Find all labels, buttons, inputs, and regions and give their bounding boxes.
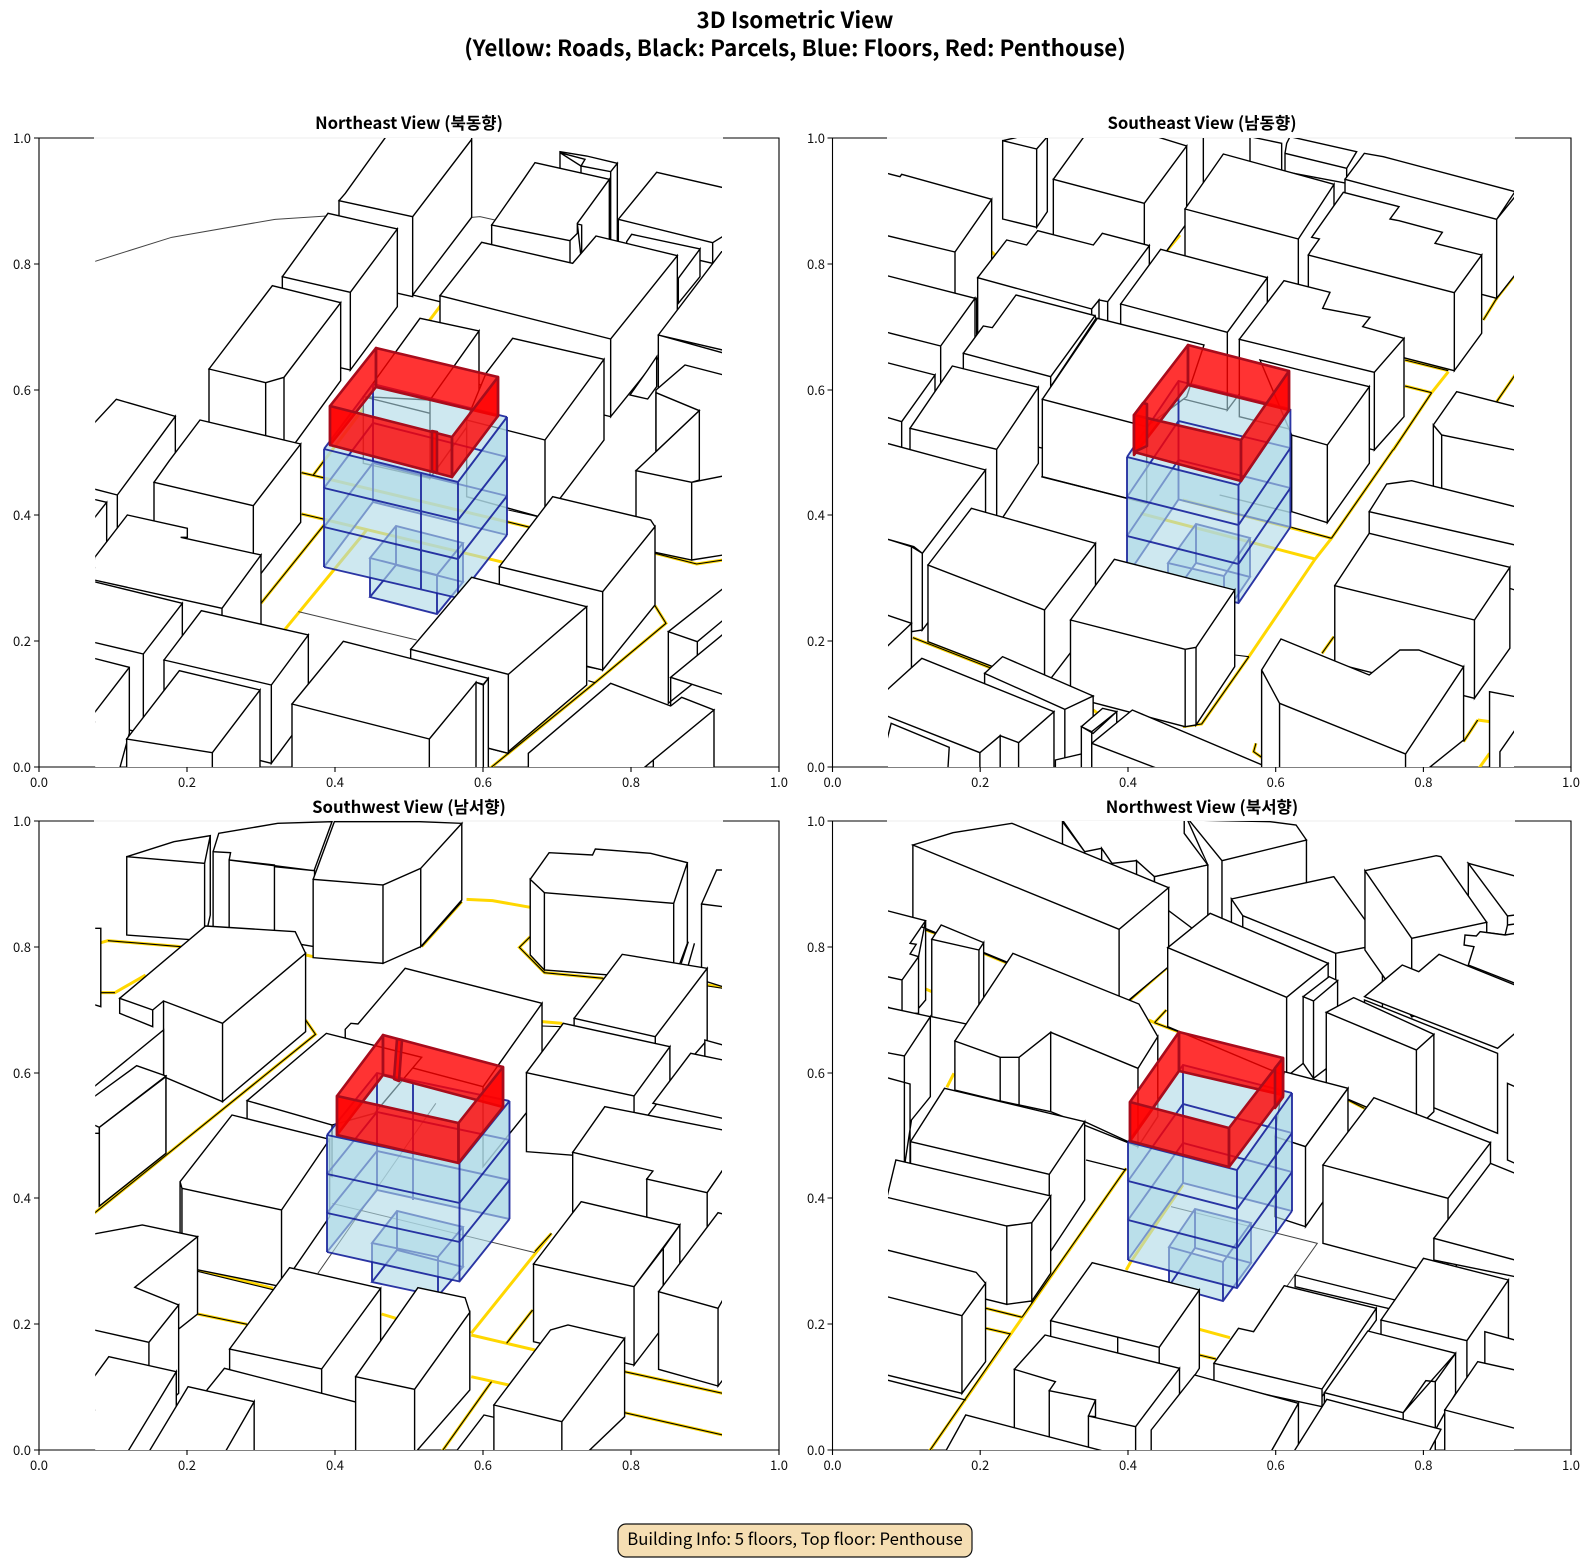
heading: northeast: Northeast View (북동향) <box>315 110 503 134</box>
axes: northeast: 0.6 <box>474 772 492 791</box>
axes: southwest: 0.2 <box>178 1455 196 1474</box>
axes: southwest: 0.8 <box>622 1455 640 1474</box>
callout: building info <box>618 1524 972 1557</box>
penthouse: red walls <box>330 348 498 477</box>
axes: southwest: 0.8 <box>13 937 31 956</box>
buildings behind the tower <box>887 137 1515 687</box>
roads and parcels <box>923 930 1364 1460</box>
callout: building info: Building Info: 5 floors, Top floor: Penthouse <box>627 1526 963 1550</box>
buildings in front of the tower <box>290 496 716 767</box>
axes: northwest: 1.0 <box>1562 1455 1580 1474</box>
drawing: southwest scene <box>94 822 723 1477</box>
axes: northeast: 0.4 <box>326 772 344 791</box>
floors: blue tower <box>327 1073 510 1296</box>
axes: northwest: 0.2 <box>971 1455 989 1474</box>
axes: southwest: 0.0 <box>30 1455 48 1474</box>
axes: southwest: 1.0 <box>770 1455 788 1474</box>
buildings behind the tower <box>887 820 1515 1400</box>
penthouse: red walls <box>337 1035 503 1163</box>
axes: southeast: 0.6 <box>1267 772 1285 791</box>
axes: northwest: 0.4 <box>807 1188 825 1207</box>
axes: northwest: 0.4 <box>1119 1455 1137 1474</box>
buildings in front of the tower <box>887 533 1515 787</box>
axes: southwest: 1.0 <box>13 811 31 830</box>
title: (Yellow: Roads, Black: Parcels, Blue: Floors, Red: Penthouse) <box>464 31 1126 63</box>
floors: blue tower <box>1127 381 1290 615</box>
buildings in front of the tower <box>95 1266 626 1450</box>
roads and parcels <box>94 216 723 768</box>
axes: northeast: 0.0 <box>13 757 31 776</box>
axes: northeast: 1.0 <box>13 128 31 147</box>
axes: northwest: 1.0 <box>807 811 825 830</box>
axes: southeast: 0.8 <box>1414 772 1432 791</box>
floors: blue tower <box>324 384 507 614</box>
axes: northwest: 0.6 <box>807 1063 825 1082</box>
axes: northwest: 0.2 <box>807 1314 825 1333</box>
axes: southeast: 0.4 <box>1119 772 1137 791</box>
axes: southeast: 1.0 <box>1562 772 1580 791</box>
drawing: northeast scene <box>95 138 722 767</box>
axes: northeast: 1.0 <box>770 772 788 791</box>
axes: southwest: 0.6 <box>13 1063 31 1082</box>
penthouse: red walls <box>1130 1032 1283 1167</box>
axes: southwest: 0.0 <box>13 1440 31 1459</box>
axes: southeast: 0.2 <box>971 772 989 791</box>
axes: southeast: 0.8 <box>807 254 825 273</box>
roads and parcels <box>913 235 1515 780</box>
axes: southeast: 0.0 <box>823 772 842 791</box>
axes: southeast: 0.2 <box>807 631 825 650</box>
title <box>464 3 1126 63</box>
axes: northeast: 0.8 <box>13 254 31 273</box>
axes: northeast: 0.2 <box>178 772 196 791</box>
axes: northwest: 0.6 <box>1267 1455 1285 1474</box>
axes: northeast: 0.2 <box>13 631 31 650</box>
panel: southeast view <box>807 110 1580 791</box>
axes: northeast <box>13 128 788 791</box>
buildings behind the tower <box>94 822 723 1420</box>
axes: southeast: 0.4 <box>807 505 825 524</box>
axes: northeast: 0.6 <box>13 380 31 399</box>
axes: northwest: 0.8 <box>807 937 825 956</box>
axes: northwest <box>807 811 1580 1474</box>
axes: southwest: 0.6 <box>474 1455 492 1474</box>
panel: southwest view <box>13 794 788 1477</box>
axes: northwest: 0.0 <box>807 1440 825 1459</box>
axes: southeast: 0.6 <box>807 380 825 399</box>
buildings behind the tower <box>95 138 722 767</box>
axes: southwest: 0.4 <box>326 1455 344 1474</box>
axes: northeast: 0.4 <box>13 505 31 524</box>
heading: southeast: Southeast View (남동향) <box>1107 110 1297 134</box>
drawing: southeast scene <box>887 137 1515 787</box>
drawing: northwest scene <box>887 820 1515 1460</box>
floors: blue tower <box>1128 1065 1292 1301</box>
axes: southeast <box>807 128 1580 791</box>
axes: southwest: 0.2 <box>13 1314 31 1333</box>
panel: northeast view <box>13 110 788 830</box>
penthouse: red walls <box>1134 345 1289 481</box>
axes: northeast: 0.0 <box>30 772 48 791</box>
roads and parcels <box>94 899 723 1460</box>
axes: southeast: 0.0 <box>807 757 825 776</box>
heading: southwest: Southwest View (남서향) <box>312 794 506 818</box>
panel: northwest view <box>807 794 1580 1474</box>
title: 3D Isometric View <box>697 3 893 35</box>
axes: northwest: 0.8 <box>1414 1455 1432 1474</box>
heading: northwest: Northwest View (북서향) <box>1106 794 1298 818</box>
axes: northwest: 0.0 <box>823 1455 842 1474</box>
axes: southwest: 0.4 <box>13 1188 31 1207</box>
buildings in front of the tower <box>944 1163 1515 1453</box>
axes: southeast: 1.0 <box>807 128 825 147</box>
axes: northeast: 0.8 <box>622 772 640 791</box>
axes: southwest <box>13 811 788 1474</box>
